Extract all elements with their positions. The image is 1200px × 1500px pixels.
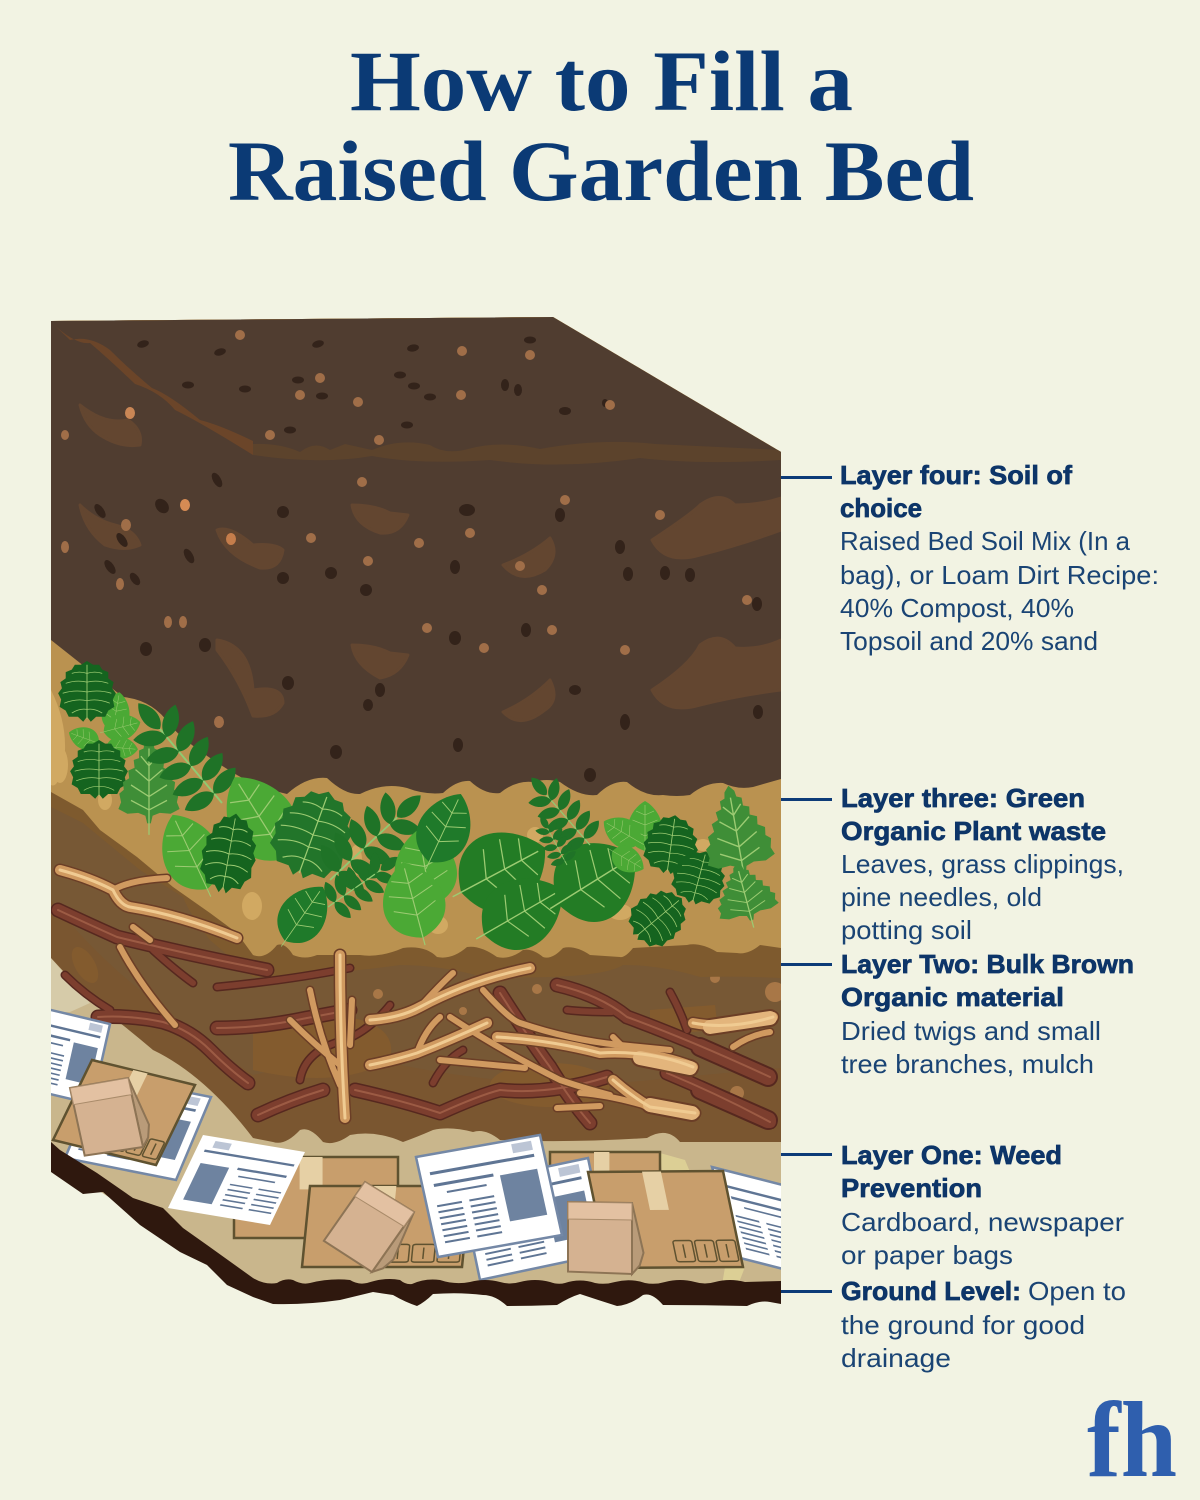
connector line: layer one (781, 1153, 832, 1156)
cardboard box: right (588, 1171, 743, 1268)
layer three: green organic tan base (51, 300, 781, 958)
leaves: right cluster (604, 786, 779, 946)
soil orange specks (61, 330, 752, 728)
label: layer four (840, 460, 1159, 656)
soil cross-section illustration (51, 317, 781, 1306)
leaves: left cluster (58, 661, 292, 897)
label: layer four: Raised Bed Soil Mix (In a (840, 526, 1131, 556)
label: layer four: Topsoil and 20% sand (840, 626, 1098, 656)
red-brown twigs (58, 910, 770, 1123)
layer two: dark top band (51, 300, 781, 978)
soil dark specks (92, 336, 763, 782)
label: layer four: bag), or Loam Dirt Recipe: (840, 560, 1159, 590)
label: layer three: pine needles, old (841, 882, 1042, 912)
label: layer four: choice (840, 493, 922, 523)
newspaper: under left box (66, 1092, 213, 1182)
soil seam lines (51, 322, 253, 455)
layer one: newspaper, cardboard and paper bags (12, 1005, 858, 1288)
label: layer two: Dried twigs and small (841, 1016, 1101, 1046)
label: layer two (841, 949, 1134, 1079)
layer two: twigs and branches (58, 870, 773, 1123)
connector line: ground level (781, 1290, 832, 1293)
label: layer four: 40% Compost, 40% (840, 593, 1074, 623)
label: ground level: the ground for good (841, 1310, 1085, 1340)
layer four: soil of choice (51, 317, 781, 796)
layer two: brown organic background (51, 300, 781, 1143)
layer three: pale tan highlights (51, 690, 711, 934)
label: layer two: tree branches, mulch (841, 1049, 1094, 1079)
label: layer one: Cardboard, newspaper (841, 1207, 1124, 1237)
label: layer three: Organic Plant waste (841, 816, 1106, 846)
label: layer one: Prevention (841, 1173, 982, 1203)
paper bag: right (568, 1202, 644, 1274)
cardboard box: centre front (302, 1186, 470, 1267)
light-tan twigs (60, 870, 773, 1118)
paper bag: centre (323, 1182, 423, 1277)
title: How to Fill a (350, 33, 853, 129)
title: Raised Garden Bed (228, 123, 974, 219)
layer two: lighter upper band (54, 317, 781, 452)
layer one: weed prevention base (51, 300, 781, 1295)
label: layer three: Leaves, grass clippings, (841, 849, 1124, 879)
label: ground level (841, 1276, 1126, 1373)
label: layer three (841, 783, 1124, 945)
pale accent patches (660, 1153, 745, 1285)
cardboard box: centre back (234, 1157, 398, 1238)
label: layer one (841, 1140, 1124, 1270)
newspaper: far left (51, 1008, 112, 1100)
layer three: green leaves (58, 661, 783, 969)
label: layer three: Layer three: Green (841, 783, 1085, 813)
label: layer two: Layer Two: Bulk Brown (841, 949, 1134, 979)
leaves: centre cluster (270, 778, 635, 950)
connector line: layer two (781, 963, 832, 966)
label: layer two: Organic material (841, 982, 1064, 1012)
newspaper: far right (710, 1165, 781, 1270)
newspaper: centre front (416, 1135, 562, 1257)
label: ground level: Ground Level: (841, 1276, 1021, 1306)
newspaper: centre left (168, 1135, 305, 1225)
label: layer one: or paper bags (841, 1240, 1013, 1270)
soil lighter blobs (80, 405, 781, 721)
logo: fh (1087, 1381, 1177, 1500)
paper bag: left (70, 1076, 153, 1157)
newspaper: lower centre (472, 1156, 593, 1280)
label: ground level: Open to (1028, 1276, 1126, 1306)
cardboard box: back right (548, 1150, 662, 1171)
pale ground wash (51, 958, 90, 1012)
ground level soil edge (51, 1142, 781, 1306)
connector line: layer four (781, 476, 832, 479)
label: ground level: drainage (841, 1343, 951, 1373)
cardboard box: left (53, 1060, 195, 1165)
label: layer four: Layer four: Soil of (840, 460, 1072, 490)
connector line: layer three (781, 798, 832, 801)
layer two: warm soil patches (66, 943, 718, 1107)
label: layer one: Layer One: Weed (841, 1140, 1062, 1170)
label: layer three: potting soil (841, 915, 972, 945)
title (228, 33, 974, 219)
layer two: small pebbles (373, 973, 785, 1100)
